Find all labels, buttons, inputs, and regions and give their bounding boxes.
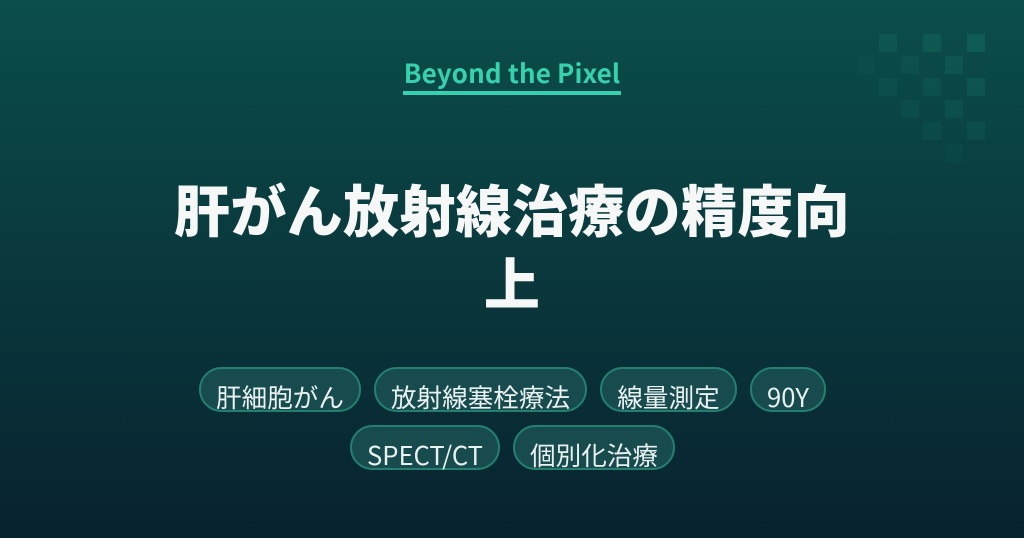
tag: 個別化治療: 個別化治療 — [530, 436, 658, 473]
tag: 放射線塞栓療法: 放射線塞栓療法 — [391, 378, 570, 415]
tag: 個別化治療 — [513, 425, 675, 470]
tag: 線量測定 — [600, 367, 737, 412]
tag: 線量測定: 線量測定 — [617, 378, 720, 415]
title: 肝がん放射線治療の精度向 — [174, 168, 850, 249]
tag: SPECT/CT — [350, 425, 500, 470]
tag: 放射線塞栓療法 — [374, 367, 587, 412]
brand label: Beyond the Pixel — [404, 54, 620, 91]
tag: 肝細胞がん: 肝細胞がん — [216, 378, 344, 415]
tag: 90Y: 90Y — [767, 378, 809, 415]
tag: 90Y — [750, 367, 826, 412]
title — [174, 168, 850, 322]
title: 上 — [484, 241, 540, 322]
tag: SPECT/CT: SPECT/CT — [367, 436, 483, 473]
brand underline — [403, 91, 621, 95]
tag: 肝細胞がん — [199, 367, 361, 412]
decorative pixel grid — [879, 34, 985, 140]
